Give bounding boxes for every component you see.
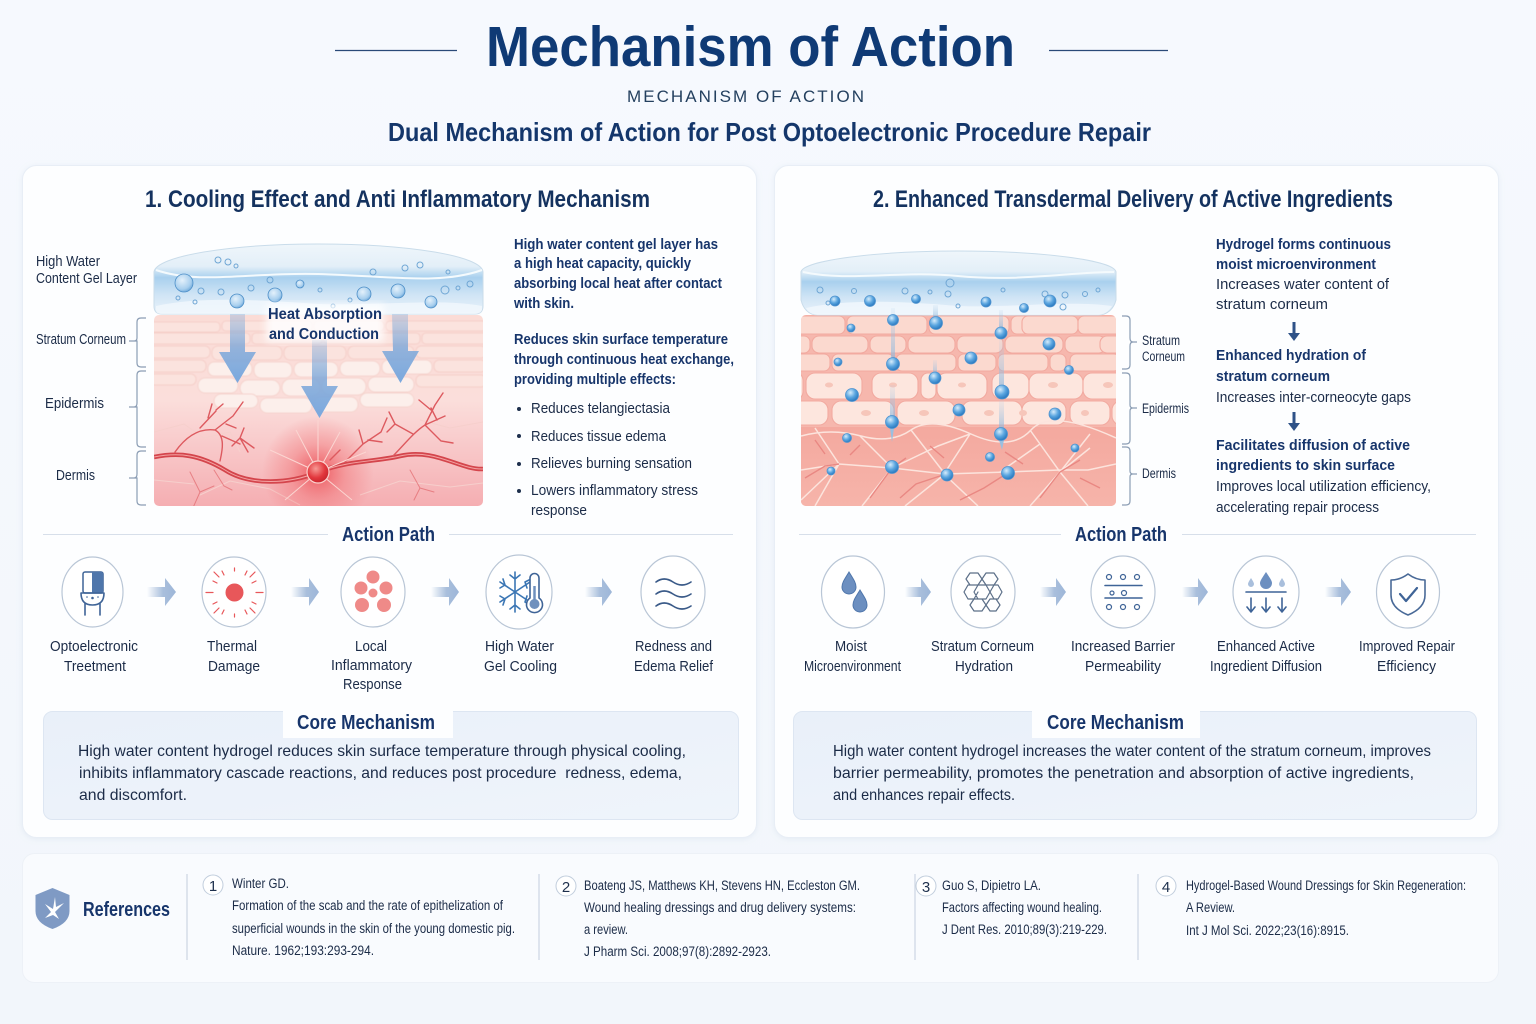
label: heat absorption: and Conduction: [269, 326, 379, 343]
gel layer: [154, 244, 483, 314]
panel: transdermal delivery: [774, 166, 1498, 838]
text block: cooling explanation: absorbing local heat after contact: [514, 275, 722, 292]
reference 2: Wound healing dressings and drug delivery systems:: [584, 900, 856, 915]
reference 2: Boateng JS, Matthews KH, Stevens HN, Eccleston GM.: [584, 878, 860, 893]
text block: delivery explanation: Increases inter-corneocyte gaps: [1216, 389, 1411, 406]
arrow: [585, 578, 612, 606]
action path labels: Redness and: [635, 639, 712, 655]
action path labels: Increased Barrier: [1071, 639, 1175, 655]
reference 2: [556, 876, 860, 959]
callout: core mechanism 2: and enhances repair effects.: [833, 787, 1015, 804]
icon: thermal damage: [202, 557, 266, 627]
action path labels: Efficiency: [1377, 659, 1437, 675]
reference 1: [203, 875, 515, 958]
icon: gel cooling: [486, 555, 552, 629]
reference 4: [1156, 876, 1466, 938]
text block: cooling explanation: High water content gel layer has: [514, 236, 718, 253]
icon: relief waves: [641, 556, 705, 628]
text block: delivery explanation: Improves local utilization efficiency,: [1216, 478, 1431, 495]
active ingredient particles: [827, 294, 1079, 481]
subtitle: Dual Mechanism of Action for Post Optoelectronic Procedure Repair: [388, 117, 1151, 147]
reference 1: Nature. 1962;193:293-294.: [232, 943, 374, 958]
title repeated in capitals: MECHANISM OF ACTION: [627, 87, 864, 106]
action path labels: Edema Relief: [634, 659, 714, 675]
reference 4: Hydrogel-Based Wound Dressings for Skin Regeneration:: [1186, 878, 1466, 893]
skin layer labels: Stratum: [1142, 333, 1180, 348]
callout: core mechanism 1: inhibits inflammatory cascade reactions, and reduces post procedure redness, edema,: [79, 765, 682, 782]
reference 1: Winter GD.: [232, 876, 289, 891]
reference 3: 3: [922, 879, 930, 896]
callout: core mechanism 2: Core Mechanism: [1047, 712, 1184, 734]
text block: cooling explanation: Lowers inflammatory stress: [531, 482, 698, 499]
heading: panel 1: 1. Cooling Effect and Anti Inflammatory Mechanism: [145, 186, 650, 213]
action path labels: Thermal: [207, 639, 257, 655]
reference 4: 4: [1162, 879, 1170, 896]
reference 3: Factors affecting wound healing.: [942, 900, 1102, 915]
callout: core mechanism 1: and discomfort.: [79, 787, 187, 804]
label: heat absorption: Heat Absorption: [268, 306, 382, 323]
reference 4: Int J Mol Sci. 2022;23(16):8915.: [1186, 923, 1349, 938]
reference 2: J Pharm Sci. 2008;97(8):2892-2923.: [584, 944, 771, 959]
callout: core mechanism 2: High water content hydrogel increases the water content of the stratum corneum, improves: [833, 743, 1431, 760]
reference 1: 1: [209, 878, 217, 895]
callout: core mechanism 1: [44, 708, 738, 820]
skin layer labels: [36, 254, 146, 505]
action path labels: Stratum Corneum: [931, 639, 1034, 655]
arrow: heat conduction left: [219, 314, 256, 383]
arrow: [1040, 578, 1066, 606]
text block: cooling explanation: providing multiple effects:: [514, 371, 676, 388]
skin layer labels: Stratum Corneum: [36, 332, 126, 348]
heading: references: References: [83, 899, 170, 921]
icon: shield check: [1376, 556, 1440, 628]
text block: delivery explanation: ingredients to skin surface: [1216, 457, 1395, 474]
arrow: heat conduction right: [382, 314, 419, 383]
action path labels: Enhanced Active: [1217, 639, 1315, 655]
reference 3: [916, 876, 1107, 937]
icon: moisture drops: [822, 556, 884, 628]
text block: delivery explanation: [1216, 236, 1431, 516]
action path labels: Improved Repair: [1359, 639, 1455, 655]
blood vessels: [154, 454, 483, 482]
arrow: down: [1288, 412, 1300, 431]
label: heat absorption: [268, 306, 382, 343]
icon: references shield: [36, 888, 70, 929]
text block: delivery explanation: stratum corneum: [1216, 368, 1330, 385]
callout: core mechanism 2: barrier permeability, promotes the penetration and absorption of active ingredients,: [833, 765, 1414, 782]
skin layer labels: Corneum: [1142, 349, 1185, 364]
action path labels: Optoelectronic: [50, 639, 138, 655]
icon: ingredient diffusion: [1233, 556, 1299, 628]
action path labels: Ingredient Diffusion: [1210, 659, 1322, 675]
action path labels: [50, 639, 714, 693]
text block: cooling explanation: Relieves burning sensation: [531, 455, 692, 472]
skin layer labels: [1122, 316, 1189, 505]
reference 2: a review.: [584, 922, 628, 937]
text block: cooling explanation: through continuous heat exchange,: [514, 351, 734, 368]
action path labels: Treetment: [64, 659, 126, 675]
action path labels: Local: [355, 639, 387, 655]
action path labels: Microenvironment: [804, 659, 901, 675]
gel layer: [801, 251, 1116, 315]
arrow: [1182, 578, 1208, 606]
action path labels: Inflammatory: [331, 658, 413, 674]
callout: core mechanism 1: High water content hydrogel reduces skin surface temperature through physical cooling,: [78, 743, 686, 760]
arrow: [291, 578, 319, 606]
icon: corneum honeycomb: [951, 556, 1015, 628]
text block: cooling explanation: with skin.: [513, 295, 574, 312]
callout: core mechanism 1: Core Mechanism: [297, 712, 435, 734]
text block: cooling explanation: response: [531, 502, 587, 519]
text block: cooling explanation: a high heat capacity, quickly: [514, 255, 692, 272]
panel: cooling effect: [22, 166, 756, 838]
arrow: [147, 578, 176, 606]
skin layer labels: High Water: [36, 254, 100, 270]
text block: delivery explanation: Enhanced hydration of: [1216, 347, 1367, 364]
icon: barrier permeability: [1091, 556, 1155, 628]
text block: delivery explanation: accelerating repair process: [1216, 499, 1379, 516]
panel: references: [22, 854, 1498, 982]
arrow: down: [1288, 322, 1300, 341]
heading: action path 1: Action Path: [342, 524, 435, 546]
diffusion trails: [890, 305, 1004, 450]
text block: delivery explanation: Facilitates diffusion of active: [1216, 437, 1410, 454]
text block: cooling explanation: Reduces skin surface temperature: [514, 331, 728, 348]
arrow: heat conduction centre: [301, 340, 338, 418]
skin: [154, 315, 483, 506]
title: Mechanism of Action: [486, 15, 1015, 79]
action path labels: Moist: [835, 639, 867, 655]
arrow: [1325, 578, 1351, 606]
icon: local inflammation: [341, 557, 405, 627]
inflammation point: [307, 461, 329, 483]
text block: cooling explanation: Reduces telangiectasia: [531, 400, 671, 417]
callout: core mechanism 2: [794, 708, 1476, 820]
action path labels: Hydration: [955, 659, 1013, 675]
action path labels: Gel Cooling: [484, 659, 557, 675]
skin layer labels: Dermis: [1142, 466, 1176, 481]
header: [335, 15, 1168, 147]
arrow: [431, 578, 459, 606]
action path labels: [804, 639, 1455, 675]
skin layer labels: Epidermis: [1142, 401, 1189, 416]
text block: delivery explanation: Hydrogel forms continuous: [1216, 236, 1391, 253]
reference 1: Formation of the scab and the rate of epithelization of: [232, 898, 503, 913]
reference 4: A Review.: [1186, 900, 1235, 915]
skin layer labels: Epidermis: [45, 396, 104, 412]
arrow: [905, 578, 931, 606]
reference 3: Guo S, Dipietro LA.: [942, 878, 1041, 893]
skin layer labels: Content Gel Layer: [36, 271, 137, 287]
text block: delivery explanation: Increases water content of: [1216, 276, 1390, 293]
reference 2: 2: [562, 879, 570, 896]
text block: delivery explanation: moist microenvironment: [1216, 256, 1376, 273]
action path labels: Response: [343, 677, 402, 693]
text block: cooling explanation: Reduces tissue edema: [531, 428, 667, 445]
text block: delivery explanation: stratum corneum: [1216, 296, 1328, 313]
skin layer labels: Dermis: [56, 468, 95, 484]
icon: optoelectronic device: [62, 557, 123, 627]
reference 3: J Dent Res. 2010;89(3):219-229.: [942, 922, 1107, 937]
heading: action path 2: Action Path: [1075, 524, 1167, 546]
illustration: ingredient diffusion through skin: [790, 251, 1132, 507]
illustration: gel on inflamed skin: [150, 244, 488, 528]
action path labels: Damage: [208, 659, 260, 675]
action path labels: Permeability: [1085, 659, 1162, 675]
heading: panel 2: 2. Enhanced Transdermal Delivery of Active Ingredients: [873, 186, 1393, 213]
text block: cooling explanation: [513, 236, 734, 519]
reference 1: superficial wounds in the skin of the young domestic pig.: [232, 921, 515, 936]
action path labels: High Water: [485, 639, 554, 655]
